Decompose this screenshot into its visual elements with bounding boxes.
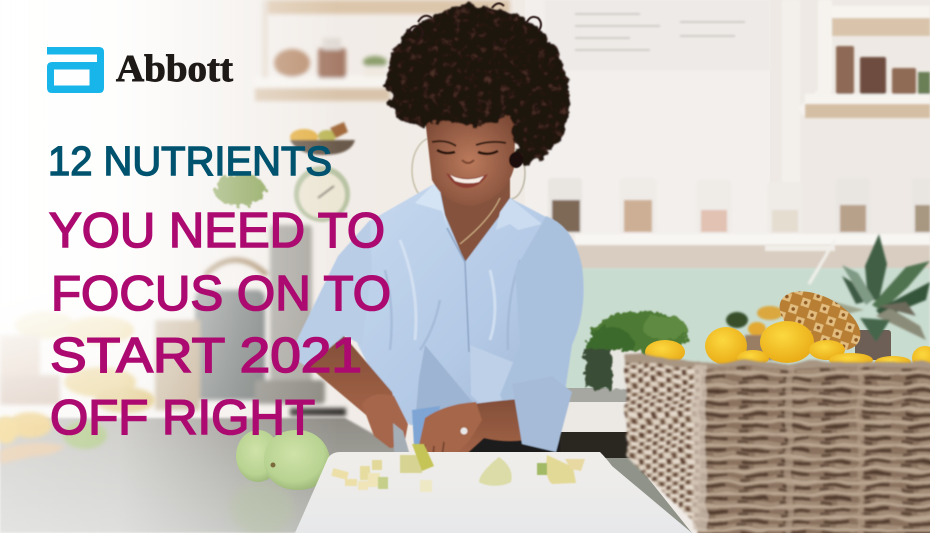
rolled cuff	[512, 376, 572, 452]
kitchen scale	[294, 166, 350, 222]
white fade overlay on left	[0, 0, 340, 533]
right forearm	[445, 398, 538, 458]
right hand	[418, 402, 482, 470]
back apple	[236, 430, 280, 482]
heading: 12 nutrients: 12 NUTRIENTS	[48, 138, 332, 184]
apple wedges right	[537, 455, 585, 484]
face	[425, 107, 516, 206]
top shelves with jars	[255, 0, 510, 101]
heading: you need to focus on to start 2021 off right: FOCUS ON TO	[51, 267, 391, 321]
heading: you need to focus on to start 2021 off right: YOU NEED TO	[49, 204, 385, 258]
apples on counter	[230, 430, 330, 533]
long shelf with glass jars	[548, 178, 930, 270]
counter and cabinet behind	[0, 388, 692, 533]
logo wordmark: Abbott	[116, 48, 233, 90]
left sleeve	[292, 220, 372, 368]
left hand	[362, 394, 408, 448]
bowl of fruit	[290, 122, 355, 155]
blender and bottles	[155, 225, 346, 416]
cutting board	[295, 452, 692, 533]
basket rim	[624, 354, 930, 368]
dark clothing under arm	[420, 432, 560, 458]
right shelving with jars	[782, 0, 930, 234]
left forearm	[308, 336, 400, 420]
poster on the wall	[545, 0, 770, 70]
plant behind basket	[585, 311, 688, 390]
heading: you need to focus on to start 2021 off right: OFF RIGHT	[50, 391, 315, 445]
shirt collar and wrinkles	[385, 181, 542, 427]
apple reflection	[230, 481, 294, 533]
front apple	[264, 430, 330, 490]
pineapple leaves	[814, 234, 930, 342]
fruit in basket	[645, 234, 930, 370]
afro hair	[387, 3, 570, 168]
earring right	[495, 147, 525, 199]
chopped apples	[331, 444, 585, 492]
apple being cut	[400, 444, 434, 473]
basket front face	[697, 364, 930, 533]
pineapple	[770, 279, 870, 363]
basket left face	[624, 358, 702, 526]
logo mark	[47, 47, 104, 93]
Abbott logo	[47, 47, 233, 93]
fruit pile	[0, 311, 155, 464]
wicker basket	[624, 354, 930, 533]
plant on left	[214, 174, 266, 206]
torso shirt	[345, 183, 570, 425]
necklace	[460, 198, 500, 244]
mint green wall	[560, 240, 930, 393]
diced pile left	[331, 460, 432, 492]
heading: you need to focus on to start 2021 off right: START 2021	[50, 329, 362, 383]
heading: you need to focus on to start 2021 off right	[49, 204, 391, 445]
apple wedge centre	[479, 457, 512, 486]
right sleeve	[500, 216, 584, 452]
left faded kitchen objects	[0, 122, 355, 464]
knife	[393, 423, 415, 475]
neck and chest	[440, 170, 510, 262]
lemons	[645, 321, 930, 370]
small fruit behind	[726, 306, 783, 360]
earring left	[412, 138, 452, 202]
dark tin behind	[855, 330, 891, 360]
jeans	[412, 406, 440, 446]
woman slicing apples	[292, 3, 584, 475]
